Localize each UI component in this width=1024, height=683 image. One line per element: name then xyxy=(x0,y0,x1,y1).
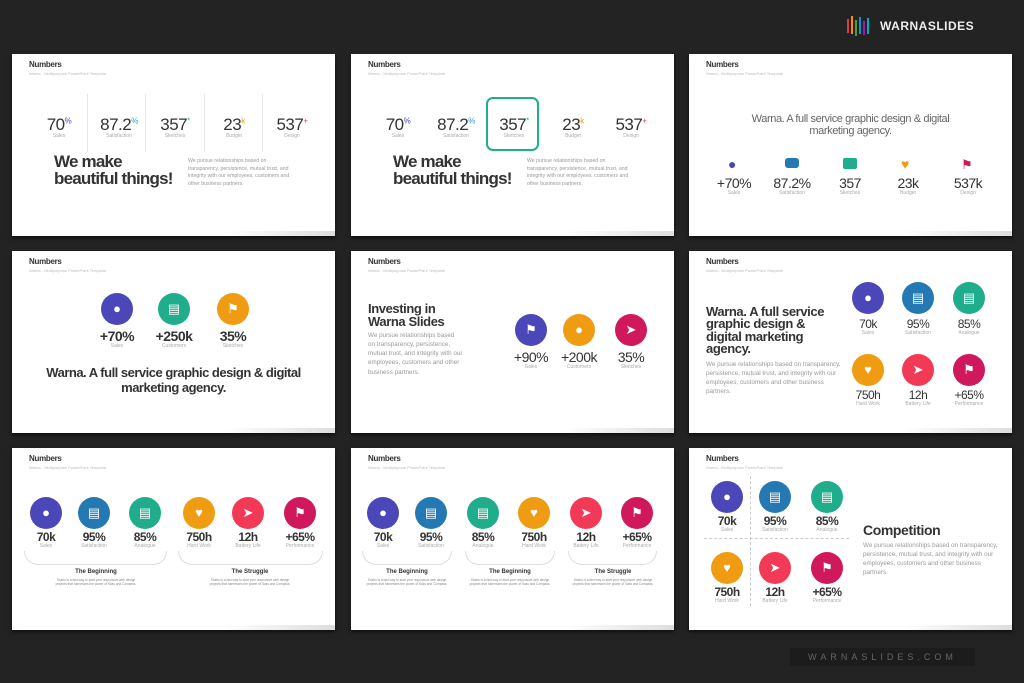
headline xyxy=(368,301,444,329)
numbers row: Sketches xyxy=(165,133,185,139)
icon grid: ♥ xyxy=(864,362,872,377)
icon stats: +200k xyxy=(561,349,597,365)
text block 3 xyxy=(572,568,654,586)
text block: beginning: The Beginning xyxy=(75,569,117,575)
numbers row: 357* xyxy=(160,115,190,134)
icon grid: 95% xyxy=(907,317,929,331)
paragraph: We pursue relationships based on transparency, persistence, mutual trust, and integrity with our employees, customers and other business partners. xyxy=(188,158,289,187)
icon grid: 750h xyxy=(714,585,740,599)
icon stats: Sketches xyxy=(621,364,641,370)
headline: beautiful things! xyxy=(54,169,173,188)
icon grid: ● xyxy=(723,489,731,504)
icon row: Sales xyxy=(377,543,389,549)
icon row: Performance xyxy=(286,543,314,549)
slide 4 xyxy=(12,251,335,433)
icon grid: 85% xyxy=(816,514,838,528)
stats with icons: ♥ xyxy=(901,156,909,172)
text block: struggle: Studio is a fast way to start your responsive web design projects that harnesses the power of Sass and Compass. xyxy=(210,578,290,586)
text block 2: Studio is a fast way to start your responsive web design projects that harnesses the power of Sass and Compass. xyxy=(470,578,550,586)
icon grid: ⚑ xyxy=(821,560,833,575)
icon grid: 70k xyxy=(859,317,877,331)
numbers row: Budget xyxy=(226,133,242,139)
icon row: Battery Life xyxy=(235,543,261,549)
slide 1: Warna - Multipurpose PowerPoint Template xyxy=(29,71,106,76)
icon grid: ▤ xyxy=(769,489,781,504)
text block 3: Studio is a fast way to start your responsive web design projects that harnesses the power of Sass and Compass. xyxy=(573,578,653,586)
braces xyxy=(24,551,167,565)
icon grid: 95% xyxy=(764,514,786,528)
icon grid: ➤ xyxy=(770,560,780,575)
icon row: ▤ xyxy=(425,505,437,520)
slide 6: Numbers xyxy=(706,257,739,266)
icon grid: ⚑ xyxy=(963,362,975,377)
icon row: ▤ xyxy=(139,505,151,520)
icon row: ▤ xyxy=(477,505,489,520)
numbers row: Sketches xyxy=(504,133,524,139)
icon row: 12h xyxy=(576,530,596,544)
stats with icons: 357 xyxy=(839,175,861,191)
icon grid: 70k xyxy=(718,514,736,528)
icon row: Satisfaction xyxy=(81,543,107,549)
footer url: WARNASLIDES.COM xyxy=(808,652,957,662)
icon grid: ▤ xyxy=(821,489,833,504)
headline: Warna Slides xyxy=(368,314,444,329)
icon row: Hard Work xyxy=(522,543,546,549)
paragraph: We pursue relationships based on transparency, persistence, mutual trust, and integrity with our employees, customers and other business partners. xyxy=(368,332,462,376)
numbers row: 537+ xyxy=(615,115,647,134)
headline: beautiful things! xyxy=(393,169,512,188)
numbers row: Satisfaction xyxy=(106,133,132,139)
icon grid: ♥ xyxy=(723,560,731,575)
slide 6 xyxy=(689,251,1012,433)
icon grid: Battery Life xyxy=(762,598,788,604)
icon stats: Sales xyxy=(525,364,537,370)
stats with icons: ⚑ xyxy=(961,157,973,172)
headline: We make xyxy=(393,152,461,171)
icon row: Performance xyxy=(623,543,651,549)
stats with icons: Satisfaction xyxy=(779,190,805,196)
icon row: +65% xyxy=(622,530,652,544)
icon grid xyxy=(852,282,985,407)
icon grid: Battery Life xyxy=(905,401,931,407)
icon circles xyxy=(100,293,249,349)
icon circles: +250k xyxy=(156,328,192,344)
icon row: Sales xyxy=(40,543,52,549)
stats with icons: +70% xyxy=(717,175,751,191)
slide 8 xyxy=(351,448,674,630)
slide 8: Numbers xyxy=(368,454,401,463)
icon row: ⚑ xyxy=(631,505,643,520)
icon circles: +70% xyxy=(100,328,134,344)
slide 5: Numbers xyxy=(368,257,401,266)
icon grid: Performance xyxy=(955,401,983,407)
icon row: Satisfaction xyxy=(418,543,444,549)
text block: struggle xyxy=(210,568,290,586)
slide 8: Warna - Multipurpose PowerPoint Template xyxy=(368,465,445,470)
slide 7: Numbers xyxy=(29,454,62,463)
icon grid: Analogue xyxy=(816,527,838,533)
icon grid: Satisfaction xyxy=(762,527,788,533)
headline: Investing in xyxy=(368,301,435,316)
headline xyxy=(393,152,512,188)
slide 4: Warna - Multipurpose PowerPoint Template xyxy=(29,268,106,273)
icon row: 750h xyxy=(521,530,547,544)
icon row: 85% xyxy=(134,530,156,544)
icon grid: 12h xyxy=(909,388,927,402)
stats with icons: Budget xyxy=(900,190,916,196)
icon row: ▤ xyxy=(88,505,100,520)
text block 2 xyxy=(470,568,550,586)
headline xyxy=(54,152,173,188)
icon grid: Sales xyxy=(862,330,874,336)
icon row: Hard Work xyxy=(187,543,211,549)
icon grid: Analogue xyxy=(958,330,980,336)
icon circles: ⚑ xyxy=(227,301,239,316)
numbers row xyxy=(386,115,647,139)
numbers row: 23k xyxy=(223,115,245,134)
icon circles: 35% xyxy=(220,328,246,344)
icon row: 70k xyxy=(374,530,392,544)
numbers row: 87.2% xyxy=(100,115,138,134)
text block 2: The Beginning xyxy=(489,569,531,575)
slide 5 xyxy=(351,251,674,433)
icon row: ● xyxy=(42,505,50,520)
icon grid: ▤ xyxy=(912,290,924,305)
footer url xyxy=(790,648,975,666)
slide 9: Warna - Multipurpose PowerPoint Template xyxy=(706,465,783,470)
numbers row: Sales xyxy=(53,133,65,139)
numbers row: 357* xyxy=(499,115,529,134)
icon grid: ● xyxy=(864,290,872,305)
slide 4: Numbers xyxy=(29,257,62,266)
slide 2 xyxy=(351,54,674,236)
icon circles: Sketches xyxy=(223,343,243,349)
icon grid: +65% xyxy=(954,388,984,402)
headline: We make xyxy=(54,152,122,171)
icon circles: ▤ xyxy=(168,301,180,316)
icon row: ● xyxy=(379,505,387,520)
icon row xyxy=(30,497,316,549)
icon grid: Hard Work xyxy=(715,598,739,604)
icon row: 12h xyxy=(238,530,258,544)
slide 3 xyxy=(689,54,1012,236)
slide 1 xyxy=(12,54,335,236)
icon grid: Sales xyxy=(721,527,733,533)
numbers row: Sales xyxy=(392,133,404,139)
headline: Competition xyxy=(863,522,940,538)
icon grid: Hard Work xyxy=(856,401,880,407)
icon row: Battery Life xyxy=(573,543,599,549)
stats with icons: 23k xyxy=(897,175,919,191)
icon row: 85% xyxy=(472,530,494,544)
icon grid: 750h xyxy=(856,388,880,402)
icon row: ➤ xyxy=(243,505,253,520)
numbers row: Budget xyxy=(565,133,581,139)
numbers row: Satisfaction xyxy=(443,133,469,139)
icon stats: +90% xyxy=(514,349,548,365)
paragraph: We pursue relationships based on transparency, persistence, mutual trust, and integrity with our employees, customers and other business partners. xyxy=(863,542,998,576)
slide 6: Warna - Multipurpose PowerPoint Template xyxy=(706,268,783,273)
text block 1: Studio is a fast way to start your responsive web design projects that harnesses the power of Sass and Compass. xyxy=(367,578,447,586)
icon stats xyxy=(514,314,647,370)
logo xyxy=(847,16,974,36)
icon grid xyxy=(704,476,849,606)
icon stats: ⚑ xyxy=(525,322,537,337)
stats with icons xyxy=(717,156,983,196)
numbers row: 70% xyxy=(386,115,410,134)
icon row: 70k xyxy=(37,530,55,544)
slide 7 xyxy=(12,448,335,630)
icon row xyxy=(367,497,653,549)
slide 1: Numbers xyxy=(29,60,62,69)
numbers row: Design xyxy=(284,133,300,139)
numbers row: 70% xyxy=(47,115,71,134)
headline: Warna. A full service graphic design & digital marketing agency. xyxy=(46,365,301,395)
stats with icons: 537k xyxy=(954,175,982,191)
icon stats: 35% xyxy=(618,349,644,365)
paragraph: We pursue relationships based on transparency, persistence, mutual trust, and integrity with our employees, customers and other business partners. xyxy=(706,361,841,395)
icon grid: ▤ xyxy=(963,290,975,305)
text block 1 xyxy=(366,568,448,586)
slide 9 xyxy=(689,448,1012,630)
highlight box xyxy=(486,97,539,151)
icon row: ⚑ xyxy=(294,505,306,520)
icon: color bars xyxy=(847,16,869,36)
paragraph: We pursue relationships based on transparency, persistence, mutual trust, and integrity with our employees, customers and other business partners. xyxy=(527,158,628,187)
slide 3: Warna - Multipurpose PowerPoint Template xyxy=(706,71,783,76)
icon row: Analogue xyxy=(472,543,494,549)
braces xyxy=(362,551,452,565)
slide 3: Numbers xyxy=(706,60,739,69)
slide 7: Warna - Multipurpose PowerPoint Template xyxy=(29,465,106,470)
icon stats: ● xyxy=(575,322,583,337)
text block: beginning: Studio is a fast way to start your responsive web design projects that harnesses the power of Sass and Compass. xyxy=(56,578,136,586)
text block: struggle: The Struggle xyxy=(232,569,268,575)
icon stats: Customers xyxy=(567,364,591,370)
icon row: 95% xyxy=(83,530,105,544)
icon grid: 85% xyxy=(958,317,980,331)
icon grid: ➤ xyxy=(913,362,923,377)
icon row: Analogue xyxy=(134,543,156,549)
slide 2: Numbers xyxy=(368,60,401,69)
icon stats: ➤ xyxy=(626,322,636,337)
numbers row: 87.2% xyxy=(437,115,475,134)
numbers row: Design xyxy=(623,133,639,139)
icon row: ♥ xyxy=(530,505,538,520)
icon row: +65% xyxy=(285,530,315,544)
icon grid: +65% xyxy=(812,585,842,599)
icon circles: Sales xyxy=(111,343,123,349)
slide 9: Numbers xyxy=(706,454,739,463)
icon grid: 12h xyxy=(765,585,785,599)
numbers row: 23k xyxy=(562,115,584,134)
numbers row: 537+ xyxy=(276,115,308,134)
numbers row xyxy=(47,94,308,152)
stats with icons: ● xyxy=(728,156,736,172)
icon grid: Satisfaction xyxy=(905,330,931,336)
stats with icons: 87.2% xyxy=(773,175,811,191)
icon circles: Customers xyxy=(162,343,186,349)
slide 2: Warna - Multipurpose PowerPoint Template xyxy=(368,71,445,76)
icon row: ♥ xyxy=(195,505,203,520)
brand name: WARNASLIDES xyxy=(880,19,974,33)
stats with icons: Sales xyxy=(728,190,740,196)
text block: beginning xyxy=(56,568,136,586)
heading text: Warna. A full service graphic design & digital marketing agency. xyxy=(752,113,949,137)
slide 5: Warna - Multipurpose PowerPoint Template xyxy=(368,268,445,273)
icon row: 95% xyxy=(420,530,442,544)
text block 1: The Beginning xyxy=(386,569,428,575)
icon grid: Performance xyxy=(813,598,841,604)
stats with icons: Design xyxy=(960,190,976,196)
icon circles: ● xyxy=(113,301,121,316)
icon row: ➤ xyxy=(581,505,591,520)
headline: Warna. A full service graphic design & digital marketing agency. xyxy=(706,304,824,356)
stats with icons: Sketches xyxy=(840,190,860,196)
text block 3: The Struggle xyxy=(595,569,631,575)
icon row: 750h xyxy=(186,530,212,544)
